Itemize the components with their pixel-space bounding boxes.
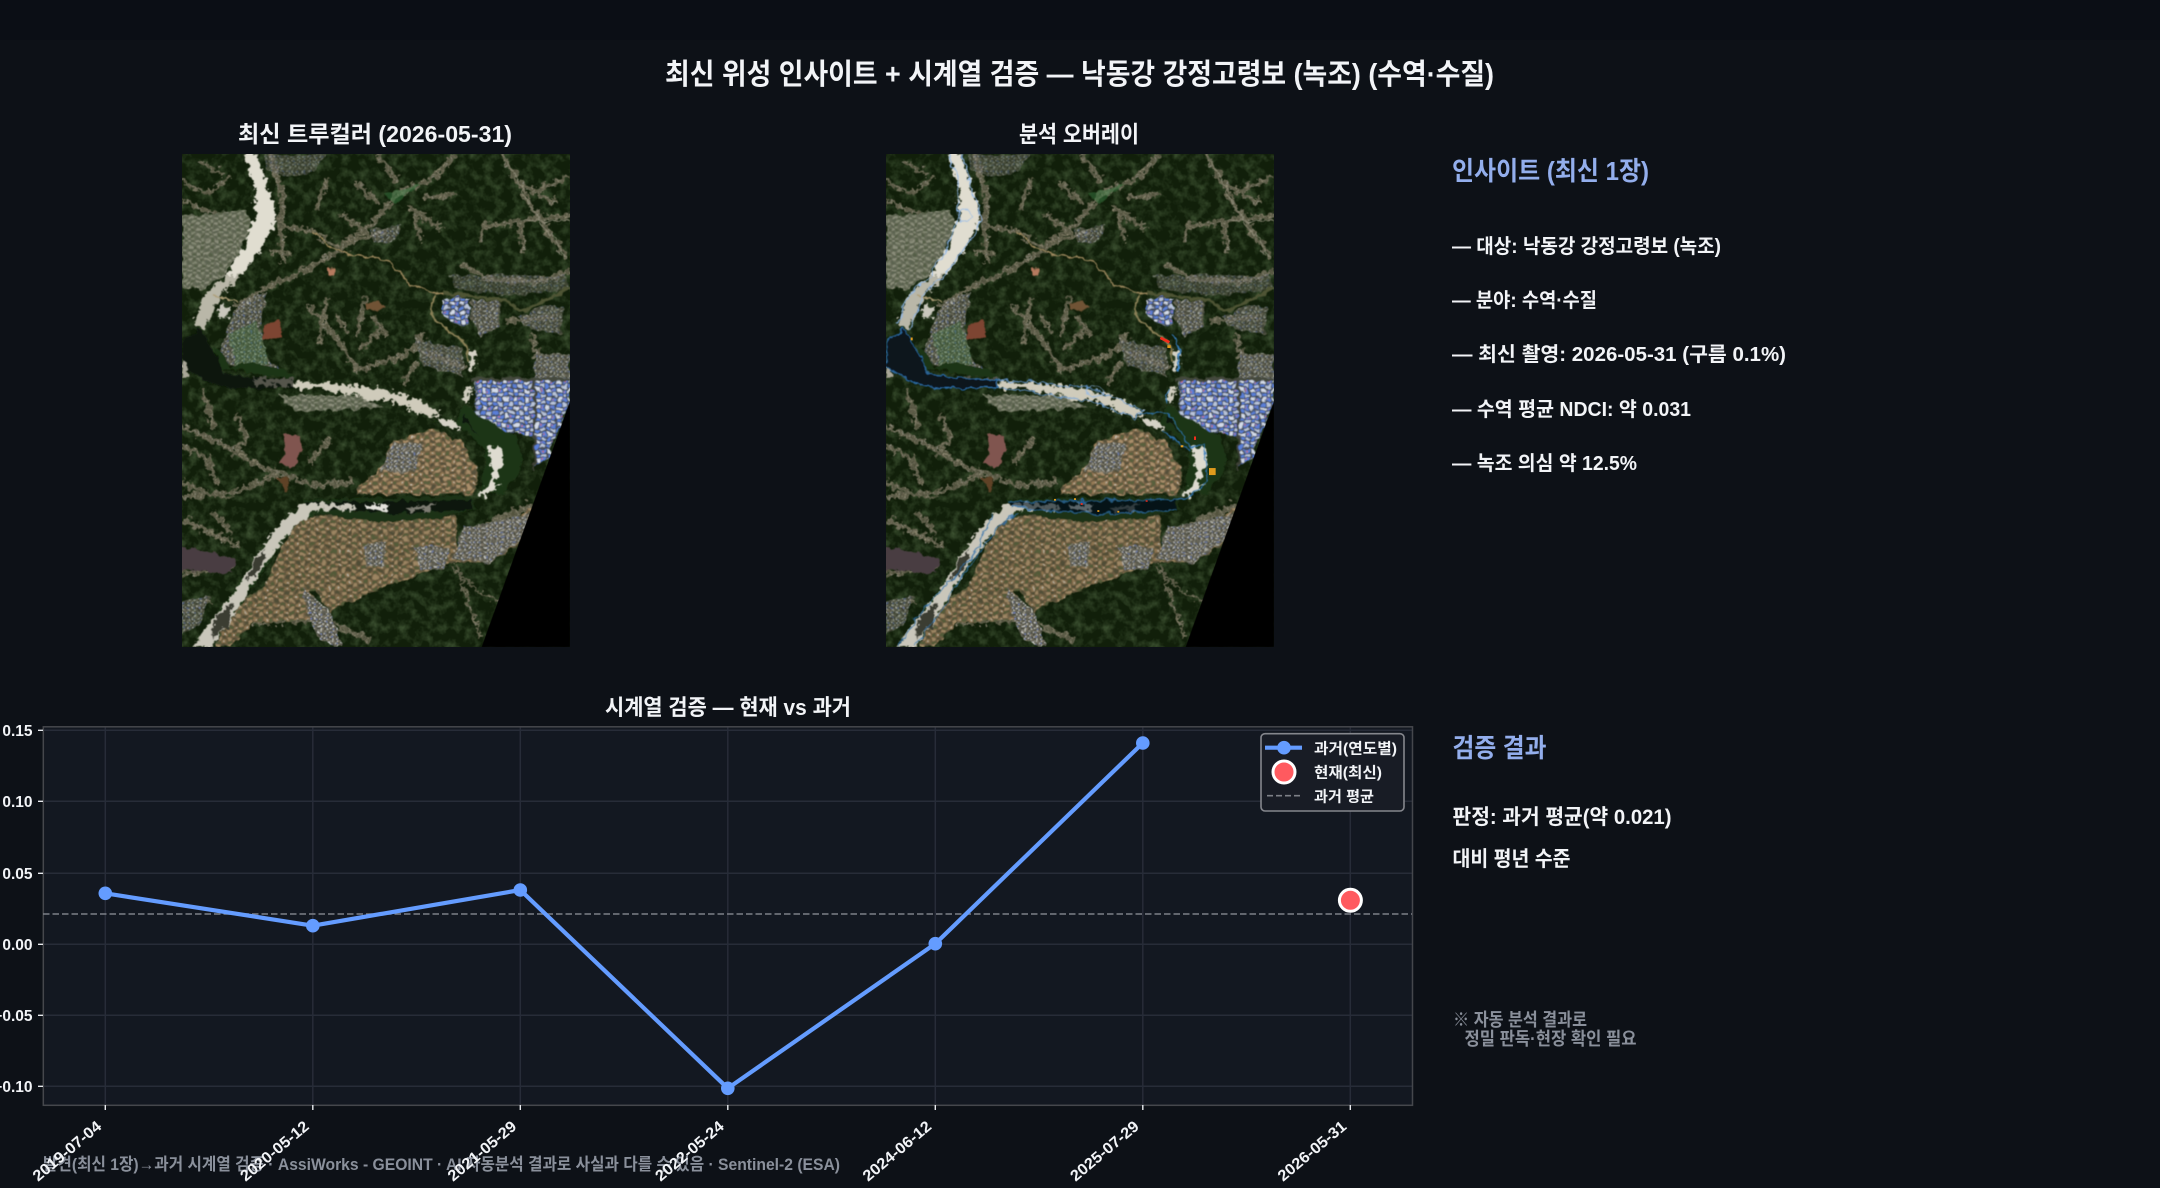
verdict line 1: 판정: 과거 평균(약 0.021)	[1452, 806, 1672, 829]
tan road and tributary	[213, 156, 570, 363]
panel: analysis overlay image	[886, 121, 1274, 647]
satellite image: overlay	[886, 154, 1274, 647]
plot area	[43, 727, 1412, 1105]
y-axis labels: 0.15	[2, 723, 33, 740]
insight: NDCI: — 수역 평균 NDCI: 약 0.031	[1452, 398, 1691, 421]
x-axis date labels: 2025-07-29	[1067, 1118, 1143, 1185]
insight: field: — 분야: 수역·수질	[1452, 289, 1597, 312]
disclaimer	[1453, 1010, 1636, 1049]
panel: insight text	[1452, 156, 1786, 475]
x-axis date labels: 2026-05-31	[1275, 1118, 1350, 1185]
industrial complex	[475, 380, 570, 465]
x-axis date labels	[30, 1118, 1350, 1185]
insight: target: — 대상: 낙동강 강정고령보 (녹조)	[1452, 235, 1721, 258]
heading: validation: 검증 결과	[1452, 733, 1547, 763]
y-axis labels: 0.05	[2, 866, 33, 883]
disclaimer: 정밀 판독·현장 확인 필요	[1464, 1029, 1636, 1049]
y-axis labels: 0.00	[2, 937, 32, 954]
x-axis date labels: 2019-07-04	[30, 1118, 105, 1185]
past series line	[98, 736, 1150, 1095]
x-axis date labels: 2020-05-12	[237, 1118, 313, 1185]
insight: algae suspicion: — 녹조 의심 약 12.5%	[1452, 452, 1637, 475]
current value marker	[1339, 889, 1361, 911]
verdict line 2: 대비 평년 수준	[1452, 848, 1570, 871]
legend	[1261, 734, 1404, 811]
y-axis labels	[0, 723, 33, 1096]
no-data wedge	[482, 401, 570, 647]
x-axis date labels: 2021-05-29	[445, 1118, 520, 1185]
x-axis date labels: 2022-05-24	[652, 1118, 728, 1185]
sand and river bars	[227, 154, 277, 275]
legend: 과거 평균	[1314, 788, 1374, 806]
brown patches	[262, 321, 283, 339]
line chart: time series validation	[0, 695, 1412, 1185]
past mean dashed line	[43, 913, 1412, 915]
satellite image: true colour	[182, 154, 570, 647]
y-axis labels: 0.10	[2, 794, 32, 811]
disclaimer: ※ 자동 분석 결과로	[1453, 1010, 1587, 1030]
panel: latest true colour image	[182, 121, 570, 647]
heading: overlay: 분석 오버레이	[1019, 121, 1139, 147]
farmland and settlements	[182, 210, 250, 289]
title: 최신 위성 인사이트 + 시계열 검증 — 낙동강 강정고령보 (녹조) (수역·수질)	[665, 58, 1494, 91]
footer note: 발견(최신 1장)→과거 시계열 검증 · AssiWorks - GEOINT · AI 자동분석 결과로 사실과 다를 수 있음 · Sentinel-2 (ESA)	[43, 1155, 840, 1174]
legend: 과거(연도별)	[1314, 740, 1397, 758]
riparian green	[213, 349, 293, 379]
heading: true colour: 최신 트루컬러 (2026-05-31)	[238, 121, 512, 147]
insight: capture date: — 최신 촬영: 2026-05-31 (구름 0.1%)	[1452, 343, 1786, 366]
heading: insights: 인사이트 (최신 1장)	[1452, 156, 1649, 186]
chart title: 시계열 검증 — 현재 vs 과거	[605, 695, 851, 720]
water	[182, 328, 293, 388]
panel: validation result	[1452, 733, 1672, 1049]
x-axis date labels: 2024-06-12	[860, 1118, 935, 1185]
legend: 현재(최신)	[1314, 764, 1382, 782]
